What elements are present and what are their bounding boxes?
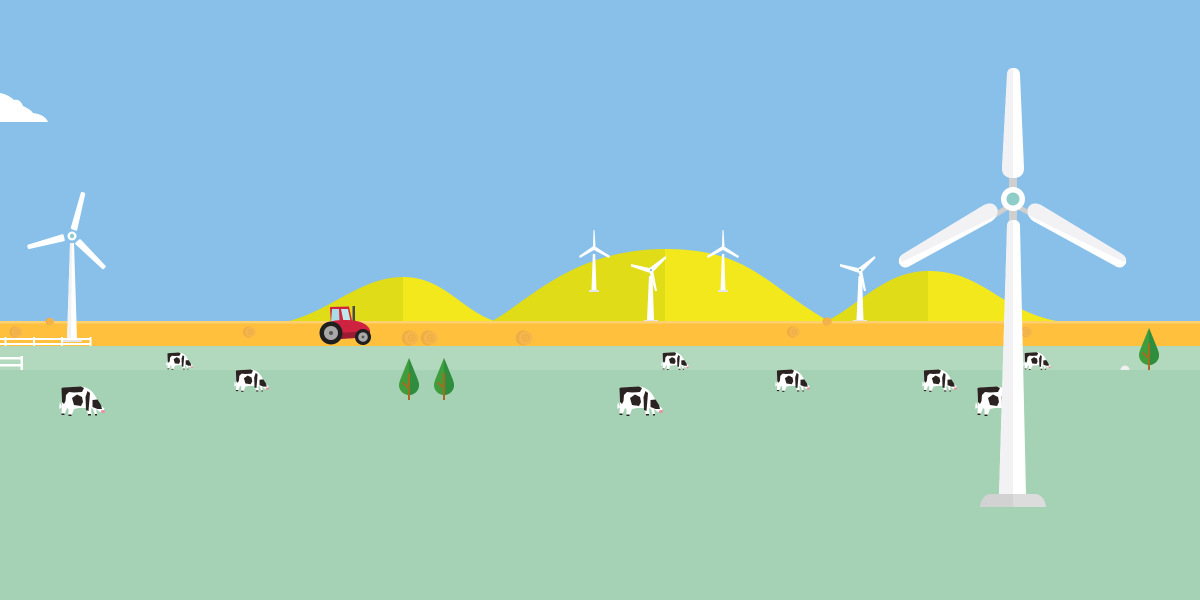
top blade: [1002, 68, 1024, 178]
fences: [0, 337, 92, 370]
field: orange crop band: [0, 321, 1200, 346]
sky: [0, 0, 1200, 322]
distant turbine 2: [707, 230, 739, 292]
pasture: [0, 346, 1200, 600]
distant turbine 1: [579, 230, 610, 292]
left blade: [899, 204, 997, 268]
turbine tower: [999, 220, 1026, 494]
trees: [399, 328, 1159, 400]
large wind turbine: [899, 68, 1126, 507]
hay bales: [9, 317, 1032, 346]
cloud: [0, 93, 48, 122]
rock: [1120, 366, 1130, 370]
blade struts: [992, 170, 1034, 224]
right blade: [1028, 204, 1126, 268]
distant turbine 3: [631, 256, 666, 322]
turbine base: [980, 494, 1046, 507]
tractor: [320, 306, 371, 345]
cows: [59, 352, 1051, 416]
hub: [1001, 187, 1025, 211]
hills: [285, 249, 1062, 322]
distant turbines: [579, 230, 876, 322]
distant turbine 4: [840, 256, 876, 322]
small turbine, left: [28, 193, 104, 342]
